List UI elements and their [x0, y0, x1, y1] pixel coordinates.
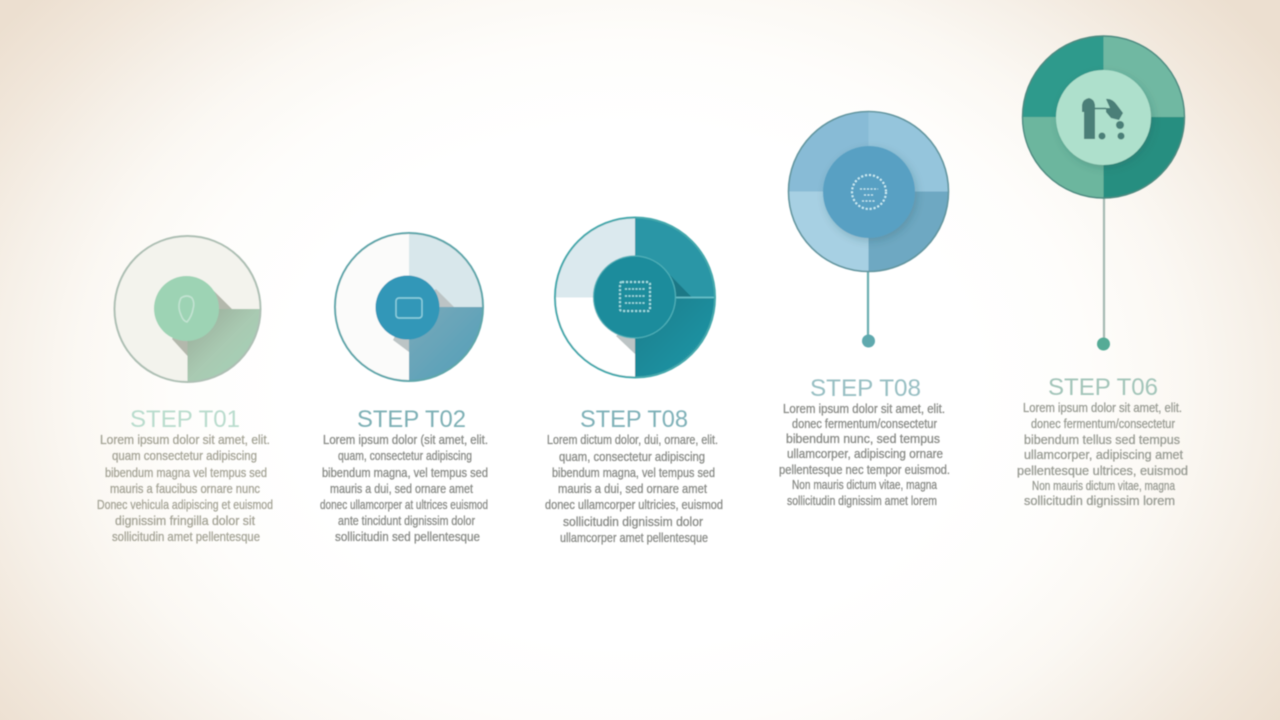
step 4 body text — [779, 402, 950, 508]
step 5 body text: Lorem ipsum dolor sit amet, elit. — [1023, 401, 1182, 415]
step 5 body text: pellentesque ultrices, euismod — [1017, 464, 1188, 478]
step 4 body text: bibendum nunc, sed tempus — [786, 432, 940, 446]
step 4 body text: Non mauris dictum vitae, magna — [792, 478, 937, 492]
step 1 body text: dignissim fringilla dolor sit — [115, 514, 256, 528]
step 1 body text: sollicitudin amet pellentesque — [112, 530, 260, 544]
step 1 body text: Lorem ipsum dolor sit amet, elit. — [100, 433, 270, 447]
step 2 body text: quam, consectetur adipiscing — [338, 449, 472, 463]
step 3 — [545, 218, 723, 545]
step 2 body text — [320, 433, 488, 544]
step 5 body text: Non mauris dictum vitae, magna — [1032, 479, 1175, 493]
step 4 body text: Lorem ipsum dolor sit amet, elit. — [783, 402, 945, 416]
step 4 stem — [862, 270, 875, 348]
step 5 body text: donec fermentum/consectetur — [1031, 417, 1175, 431]
step 3 hub — [594, 256, 676, 338]
step 2 — [320, 233, 488, 544]
step 3 heading: STEP T08 — [580, 406, 688, 433]
step 3 body text — [545, 433, 723, 545]
step 5 heading: STEP T06 — [1048, 374, 1158, 401]
step 5 circle — [1022, 36, 1184, 198]
step 4 body text: ullamcorper, adipiscing ornare — [787, 447, 943, 461]
step 4 heading: STEP T08 — [810, 375, 921, 402]
icon: dotted square — [620, 282, 650, 311]
step 2 body text: ante tincidunt dignissim dolor — [338, 514, 475, 528]
step 3 circle — [555, 218, 715, 378]
icon: dotted circle — [852, 175, 886, 209]
step 3 body text: donec ullamcorper ultricies, euismod — [545, 498, 723, 512]
step 5 body text: ullamcorper, adipiscing amet — [1024, 448, 1184, 462]
icon: rounded square — [396, 298, 422, 318]
step 5 — [1017, 36, 1188, 508]
step 4 body text: donec fermentum/consectetur — [792, 417, 937, 431]
step 4 hub — [823, 146, 915, 238]
step 1 — [97, 236, 273, 544]
step 2 heading: STEP T02 — [357, 406, 466, 433]
step 3 body text: ullamcorper amet pellentesque — [560, 531, 708, 545]
step 4 body text: pellentesque nec tempor euismod. — [779, 463, 950, 477]
step 2 body text: mauris a dui, sed ornare amet — [330, 482, 473, 496]
step 3 body text: sollicitudin dignissim dolor — [563, 515, 703, 529]
step 4 — [779, 112, 950, 508]
step 2 body text: sollicitudin sed pellentesque — [335, 530, 480, 544]
step 1 body text: Donec vehicula adipiscing et euismod — [97, 498, 273, 512]
step 1 body text: quam consectetur adipiscing — [112, 449, 257, 463]
step 5 body text: bibendum tellus sed tempus — [1024, 433, 1180, 447]
step 1 body text: bibendum magna vel tempus sed — [105, 466, 267, 480]
step 5 stem — [1097, 196, 1110, 350]
step 3 body text: mauris a dui, sed ornare amet — [558, 482, 707, 496]
step 4 body text: sollicitudin dignissim amet lorem — [787, 494, 937, 508]
step 2 circle — [335, 233, 483, 381]
step 2 hub — [376, 276, 440, 340]
step 1 heading: STEP T01 — [130, 406, 240, 433]
step 1 circle — [114, 236, 260, 382]
step 1 body text: mauris a faucibus ornare nunc — [110, 482, 260, 496]
step 1 hub — [154, 276, 219, 341]
step 3 body text: bibendum magna, vel tempus sed — [552, 466, 715, 480]
icon: head outline — [179, 296, 194, 322]
step 3 body text: quam, consectetur adipiscing — [559, 450, 705, 464]
step 2 body text: donec ullamcorper at ultrices euismod — [320, 498, 488, 512]
step 2 body text: bibendum magna, vel tempus sed — [322, 466, 488, 480]
step 5 hub — [1056, 70, 1151, 165]
step 3 body text: Lorem dictum dolor, dui, ornare, elit. — [547, 433, 718, 447]
step 4 circle — [788, 112, 948, 272]
icon: tap and drops — [1082, 98, 1124, 140]
step 5 body text — [1017, 401, 1188, 508]
step 1 body text — [97, 433, 273, 544]
step 2 body text: Lorem ipsum dolor (sit amet, elit. — [323, 433, 488, 447]
step 5 body text: sollicitudin dignissim lorem — [1024, 494, 1175, 508]
